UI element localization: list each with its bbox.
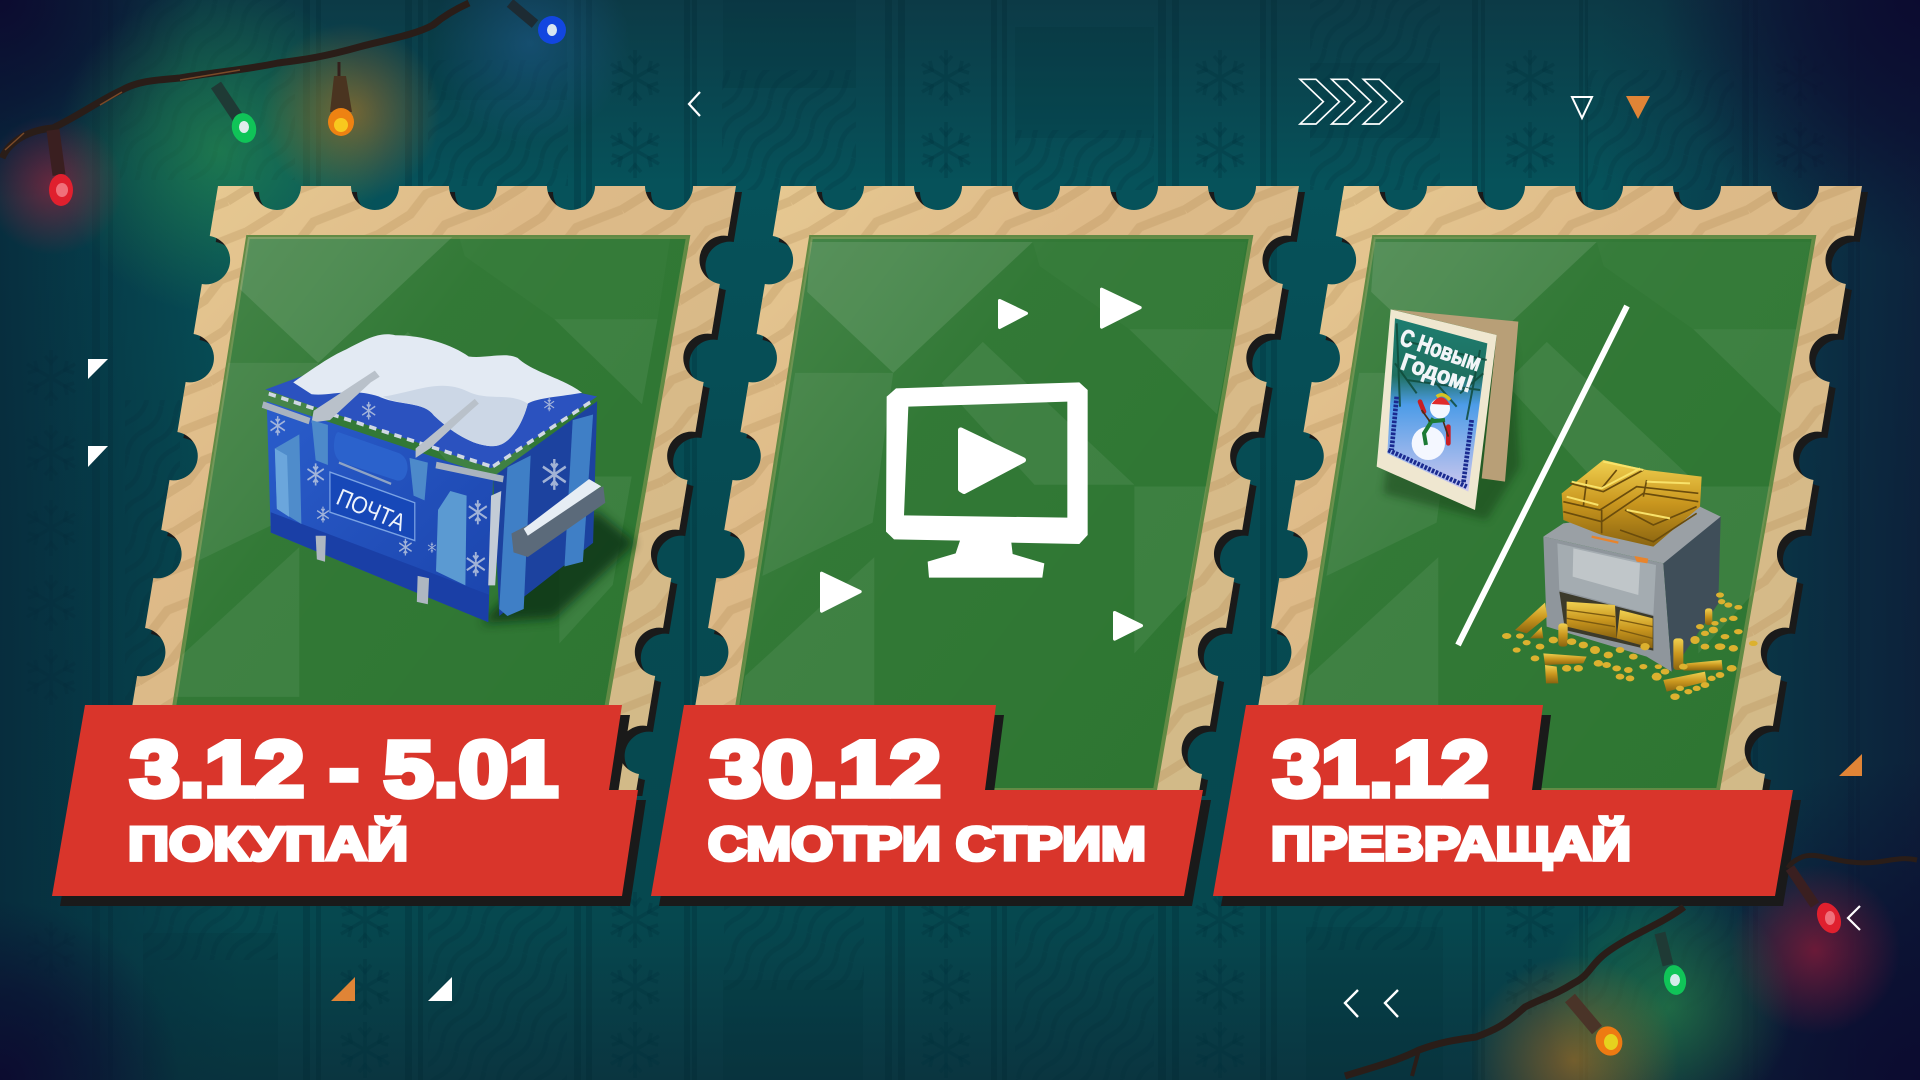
- card greeting text: С Новым: [1396, 324, 1485, 377]
- panel: stamp 1 buy mail box: [52, 186, 742, 906]
- bulb: orange: [328, 62, 354, 136]
- divider slash: [1458, 306, 1627, 645]
- icon: snowy blue mail crate: [263, 334, 636, 623]
- orange triangle bottom: [331, 977, 355, 1001]
- caption: ПОКУПАЙ: ПОКУПАЙ: [128, 817, 408, 870]
- banner 3: [1213, 705, 1801, 906]
- card greeting text: Годом!: [1397, 349, 1476, 398]
- garland: top left lights: [2, 3, 566, 206]
- triangle orange top: [1626, 96, 1650, 119]
- bulb: green right: [1660, 933, 1688, 997]
- bulb: green: [216, 85, 259, 146]
- bulb: red right: [1790, 868, 1846, 937]
- icon: small play arrows: [822, 289, 1141, 639]
- icon: new year greeting card: [1377, 309, 1520, 520]
- panel: stamp 3 convert card to gold: [1213, 186, 1868, 906]
- date: 30.12: 30.12: [710, 724, 941, 813]
- outlined chevrons top: [1300, 79, 1403, 124]
- garland: bottom right lights: [1345, 855, 1917, 1076]
- bulb: red: [49, 130, 73, 206]
- white triangle bottom: [428, 977, 452, 1001]
- white corners left: [88, 359, 108, 379]
- triangle outline: [1572, 97, 1592, 118]
- banner 2: [651, 705, 1211, 906]
- white corner left lower: [88, 446, 108, 467]
- chevron left top: [689, 92, 700, 116]
- stamp frame 1: [118, 186, 742, 796]
- icon: monitor with play button: [886, 382, 1088, 578]
- panel: stamp 2 watch stream: [651, 186, 1305, 906]
- chevron right: [1848, 906, 1860, 930]
- double chevrons bottom: [1345, 990, 1398, 1017]
- crate label: ПОЧТА: [332, 484, 409, 537]
- card greeting text: [1396, 324, 1485, 398]
- snow on lid: [293, 334, 582, 446]
- icon: gold crate with coins: [1502, 460, 1758, 700]
- date: 31.12: 31.12: [1273, 724, 1489, 813]
- caption: ПРЕВРАЩАЙ: ПРЕВРАЩАЙ: [1271, 817, 1631, 870]
- banner 1: [52, 705, 646, 906]
- date: 3.12 - 5.01: 3.12 - 5.01: [130, 724, 558, 813]
- bulb: orange right: [1570, 998, 1627, 1060]
- caption: СМОТРИ СТРИМ: СМОТРИ СТРИМ: [708, 817, 1146, 870]
- stamp frame 2: [681, 186, 1305, 796]
- stamp frame 3: [1244, 186, 1868, 796]
- bulb: blue: [510, 3, 566, 44]
- orange triangle right: [1839, 754, 1862, 776]
